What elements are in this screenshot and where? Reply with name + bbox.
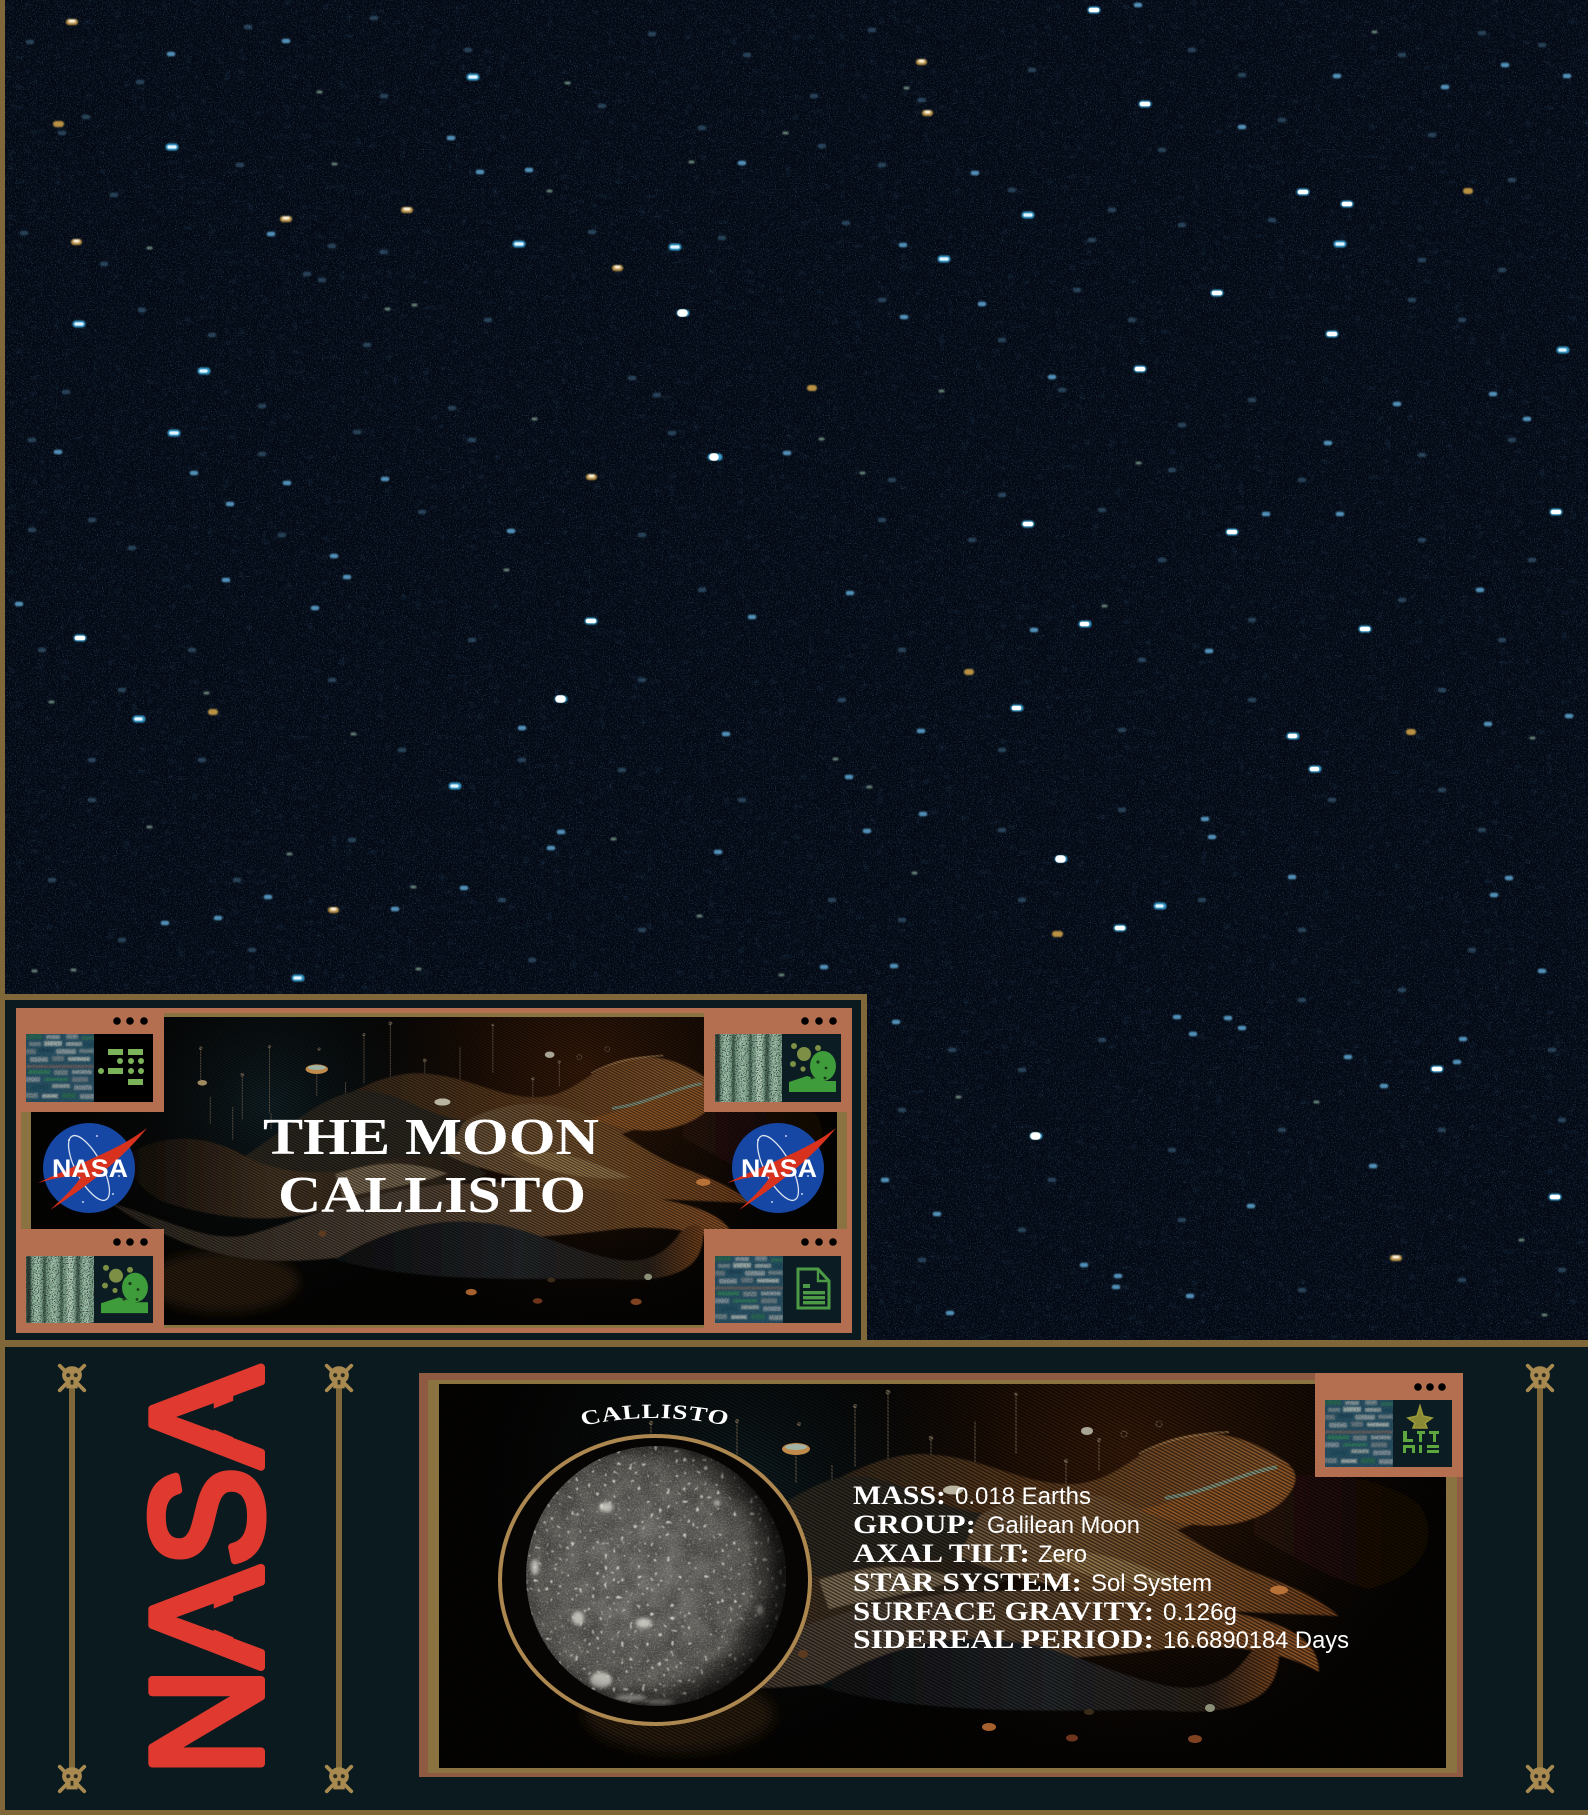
ornament: left skull pillar <box>60 1366 84 1791</box>
facts list: Sol System <box>1091 1570 1212 1597</box>
title: CALLISTO <box>278 1167 586 1224</box>
panel: header card <box>0 994 867 1340</box>
chip: glyph terminal <box>1315 1373 1463 1477</box>
moon name arc: CALLISTO <box>582 1404 728 1424</box>
chip: bottom left alien terminal <box>16 1229 164 1333</box>
background: star field <box>0 0 1588 1340</box>
logo: NASA worm: NASA <box>119 1366 295 1776</box>
facts list: STAR SYSTEM: <box>853 1568 1082 1597</box>
facts list: MASS: <box>853 1481 946 1510</box>
title <box>263 1109 599 1224</box>
icon: NASA meatball left <box>38 1123 147 1213</box>
panel: Callisto info card <box>419 1373 1463 1777</box>
facts list: Galilean Moon <box>987 1512 1140 1539</box>
facts list: 0.126g <box>1163 1599 1237 1626</box>
facts list: SURFACE GRAVITY: <box>853 1597 1154 1626</box>
info artwork <box>439 1384 1446 1768</box>
ornament: middle skull pillar <box>327 1366 351 1791</box>
ornament: right skull pillar <box>1528 1366 1552 1791</box>
chip: top right alien terminal <box>704 1008 852 1112</box>
chip: bottom right document terminal <box>704 1229 852 1333</box>
icon: NASA meatball right: NASA <box>741 1155 817 1183</box>
facts list: AXAL TILT: <box>853 1539 1030 1568</box>
facts list: GROUP: <box>853 1510 976 1539</box>
icon: NASA meatball left: NASA <box>52 1155 128 1183</box>
panel: footer band <box>0 1340 1588 1815</box>
facts list: 16.6890184 Days <box>1163 1627 1349 1654</box>
facts list: Zero <box>1038 1541 1087 1568</box>
chip: top left terminal <box>16 1008 164 1112</box>
header artwork <box>31 1017 837 1325</box>
icon: NASA meatball right <box>727 1123 836 1213</box>
left edge border <box>0 0 5 1815</box>
moon name arc <box>582 1404 728 1424</box>
facts list <box>853 1481 1349 1654</box>
moon image with ring <box>500 1436 810 1724</box>
facts list: SIDEREAL PERIOD: <box>853 1625 1154 1654</box>
facts list: 0.018 Earths <box>955 1483 1091 1510</box>
title: THE MOON <box>263 1109 599 1166</box>
